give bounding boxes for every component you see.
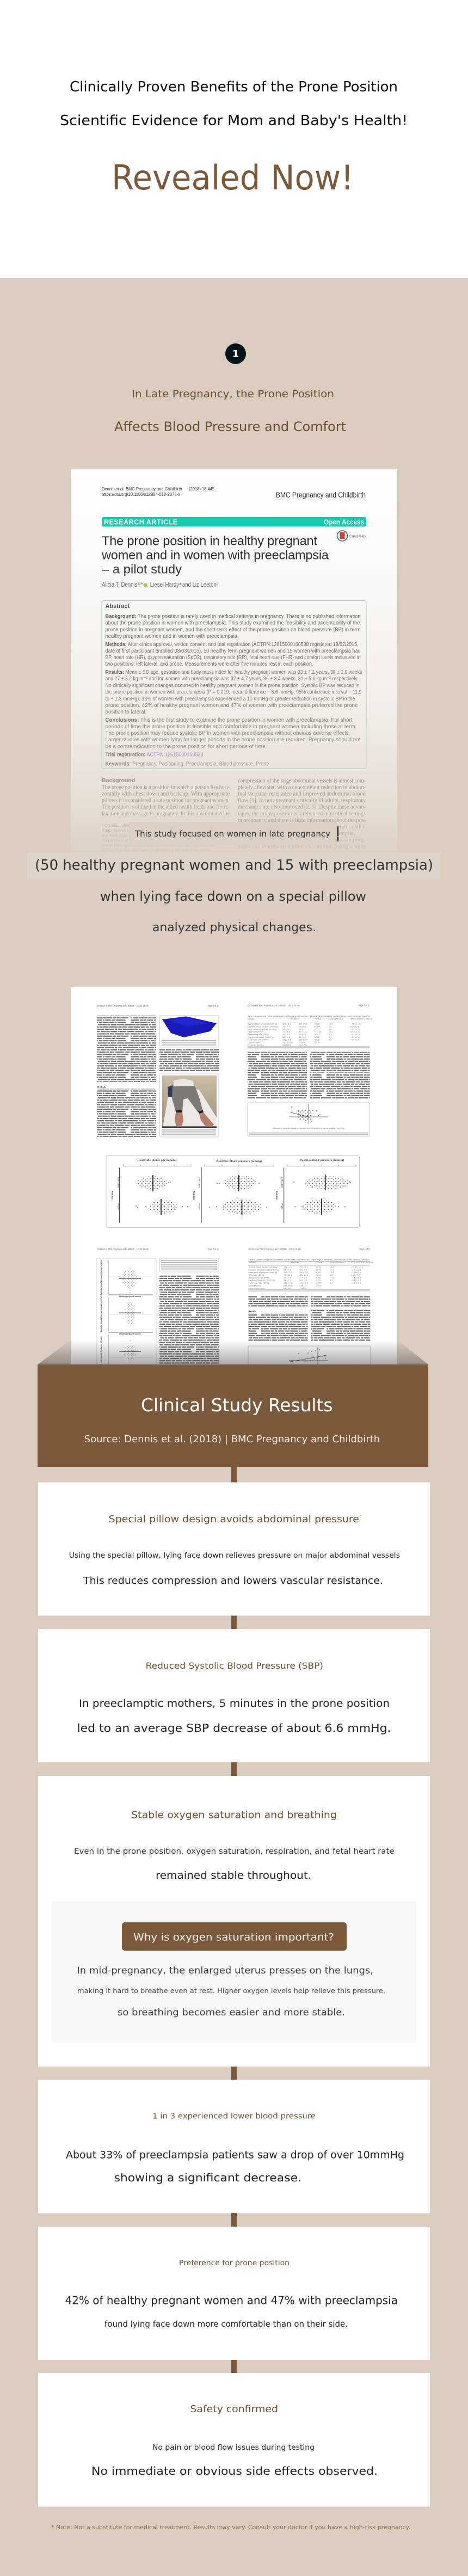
table 1: 98 ± 0.7 — [299, 1036, 306, 1038]
table 2: 0.008 — [316, 1274, 321, 1276]
banner source: Source: Dennis et al. (2018) | BMC Pregnancy and Childbirth — [84, 1434, 380, 1445]
table 1: 95% confidence interval — [350, 1018, 372, 1020]
table 2: 0.339 — [316, 1277, 321, 1279]
table 1: 85 ± 5.6 — [282, 1029, 290, 1031]
table 2: −1.4 to 8.8 — [351, 1282, 361, 1284]
table 1: Mean arterial pressure (mmHg) — [248, 1029, 276, 1031]
card body line 1: About 33% of preeclampsia patients saw a drop of over 10mmHg — [66, 2150, 404, 2161]
figure: beeswarm plots: Position — [193, 1191, 195, 1200]
table 2: Mean difference — [330, 1262, 344, 1264]
table 1: 0.6 — [329, 1038, 331, 1041]
table 2: Mean arterial pressure (mmHg) — [248, 1271, 278, 1274]
abstract box: Trial registration: ACTRN:12615000160538 — [106, 752, 204, 758]
study line 2: when lying face down on a special pillow — [100, 889, 366, 904]
card body line 2: led to an average SBP decrease of about 6.6 mmHg. — [77, 1722, 391, 1735]
table 1: 21 (42%) — [299, 1044, 307, 1046]
card: preference — [38, 2227, 430, 2360]
table 1: 75 ± 8.8 — [282, 1031, 290, 1033]
card: lower blood pressure — [38, 2080, 430, 2213]
table 2: −0.4 to 0.6 — [351, 1279, 361, 1281]
table 1: Table 1 Lateral and prone position in healthy pregnant women – physiological variables, comfort scores and preferred position — [248, 1015, 370, 1018]
table 2: 0.257 — [316, 1282, 321, 1284]
paper title: The prone position in healthy pregnant — [102, 533, 317, 548]
connector — [231, 1467, 237, 1483]
table 2: 158 ± 10 — [284, 1266, 292, 1268]
figure: beeswarm plots: Diastolic blood pressure (mmHg) — [217, 1160, 262, 1163]
table 1: −2.6 — [329, 1023, 333, 1025]
figure: change plots: Diastolic blood pressure change (mmHg) — [100, 1296, 102, 1332]
crossmark icon — [337, 531, 366, 541]
table 1: 0.004 — [315, 1025, 320, 1028]
table 2: 0.1 — [330, 1279, 332, 1281]
figure: change plots: Systolic blood pressure change (mmHg) — [100, 1259, 102, 1295]
card body line 1: Using the special pillow, lying face down relieves pressure on major abdominal vessels — [69, 1552, 400, 1560]
paper background column: Corner Flemington Rd & Grattan St, Parkville, Victoria 3052, Australia — [102, 843, 214, 848]
card body line 1: No pain or blood flow issues during testing — [152, 2444, 315, 2452]
abstract box: the prone position in women with preeclampsia (P = 0.019, mean difference − 6.6 mmHg, 95% confidence interval − 11.9 — [106, 689, 362, 696]
paper title: – a pilot study — [102, 562, 182, 576]
table 2: 0.382 — [316, 1279, 321, 1281]
figure: change plots: Heart rate change (beats per minute) — [100, 1337, 102, 1368]
table 1: 17 ± 3.3 — [299, 1034, 306, 1036]
card heading: Stable oxygen saturation and breathing — [131, 1809, 337, 1821]
page 4 header — [97, 1247, 371, 1251]
explainer button — [122, 1922, 347, 1951]
table 2: Respiratory rate (BPM) — [248, 1277, 270, 1279]
card heading: Special pillow design avoids abdominal pressure — [109, 1514, 359, 1525]
paper background column: flow [1]. In non-pregnant critically ill adults, respiratory — [238, 798, 366, 803]
table 1 — [248, 1015, 372, 1049]
table 1: 0.367 — [315, 1034, 320, 1036]
table 1: −0.4 to 1.2 — [350, 1034, 360, 1036]
card body line 2: showing a significant decrease. — [114, 2171, 301, 2184]
table 2: 98 ± 0.6 — [299, 1279, 307, 1281]
table 2: 17 ± 2.3 — [299, 1277, 307, 1279]
table 2: −3.7 to 3.5 — [351, 1269, 361, 1271]
abstract box: healthy pregnant women and in women with preeclampsia. — [106, 634, 238, 640]
paper title: women and in women with preeclampsia — [101, 548, 329, 562]
table 2: 141 ± 9.6 — [299, 1282, 308, 1284]
figure: beeswarm plots: Left lateral — [117, 1177, 120, 1188]
explainer line 2: making it hard to breathe even at rest. Higher oxygen levels help relieve this pressure, — [77, 1987, 385, 1995]
table 1: 0.519 — [315, 1038, 320, 1041]
table 1: 131 ± 8.6 — [282, 1038, 291, 1041]
connector — [231, 1762, 237, 1776]
abstract box: about the prone position in women with preeclampsia. This study examined the feasibility and acceptability of the — [106, 620, 360, 626]
abstract box: Results: Mean ± SD age, gestation and body mass index for healthy pregnant women was 33 ± 4.1 years, 38 ± 1.0 weeks — [106, 669, 362, 675]
explainer line 3: so breathing becomes easier and more stable. — [118, 2007, 345, 2018]
journal citation: https://doi.org/10.1186/s12884-018-2073-x — [102, 492, 180, 497]
abstract box: Conclusions: This is the first study to examine the prone position in women with preeclampsia. For short — [106, 717, 353, 723]
table 2: 85 ± 7.8 — [284, 1269, 291, 1271]
explainer button: Why is oxygen saturation important? — [133, 1932, 334, 1943]
table 2: P value — [316, 1262, 323, 1264]
table 1: 0.076 — [315, 1042, 320, 1044]
figure: change plots — [97, 1258, 156, 1368]
study line 1: (50 healthy pregnant women and 15 with preeclampsia) — [35, 857, 433, 874]
card: systolic blood pressure — [38, 1629, 430, 1762]
title line 1: Clinically Proven Benefits of the Prone Position — [70, 79, 398, 95]
table 1: −2.4 to 3.7 — [350, 1038, 360, 1041]
figure: beeswarm plots: Prone — [117, 1203, 120, 1210]
paper background column: tages, the prone position is rarely used in medical settings — [238, 811, 366, 817]
table 2: 7 (47%) — [299, 1288, 307, 1290]
card body line 2: No immediate or obvious side effects observed. — [91, 2464, 378, 2477]
connector — [231, 2213, 237, 2227]
table 2: 7 (5-25.8) — [284, 1284, 293, 1287]
figure: beeswarm plots: Position — [111, 1191, 114, 1200]
table 2: 4.2 — [330, 1274, 332, 1276]
footnote: * Note: Not a substitute for medical treatment. Results may vary. Consult your doctor if you have a high-risk pregnancy. — [51, 2524, 410, 2531]
table 2: Comfort score — [248, 1284, 261, 1287]
paper background column: laxation and massage in pregnancy. In this position uterine — [102, 811, 230, 817]
abstract box: Larger studies with women lying for longer periods in the prone position are required. Pregnancy should not — [106, 737, 361, 743]
paper background column: mechanics are also improved [2, 3]. Despite these advan- — [238, 804, 366, 810]
page 4 header: Dennis et al. BMC Pregnancy and Childbirth (2018) 18:445 — [97, 1247, 149, 1251]
header background — [0, 0, 468, 278]
paper background column: ¹Departments of Pharmacology and Therapeutics, — [102, 828, 188, 833]
table 2: Table 2 Lateral and prone position in women with preeclampsia – physiological variables, comfort scores and preferred position — [248, 1258, 369, 1261]
table 2: 84 ± 7.5 — [299, 1269, 307, 1271]
journal citation: Dennis et al. BMC Pregnancy and Childbirth (2018) 18:445 — [102, 487, 214, 491]
table 1: 73 ± 6.5 — [299, 1025, 306, 1028]
callout: study focus — [129, 822, 338, 845]
table 2: Heart rate (BPM) — [248, 1274, 264, 1276]
table 1: Mean difference — [329, 1018, 343, 1020]
paper background column: pillows it is considered a safe position for pregnant women. — [102, 798, 230, 803]
figure: beeswarm plots: Heart rate (beats per minute) — [137, 1159, 177, 1161]
table 1: 6.8 to 13.3 — [350, 1031, 360, 1033]
abstract box: Keywords: Pregnancy, Positioning, Preeclampsia, Blood pressure, Prone — [106, 761, 269, 767]
table 2: 110 ± 7.6 — [299, 1271, 308, 1274]
title headline: Revealed Now! — [112, 158, 354, 198]
explainer line 1: In mid-pregnancy, the enlarged uterus presses on the lungs, — [77, 1965, 373, 1976]
section kicker: In Late Pregnancy, the Prone Position — [132, 388, 334, 400]
figure: beeswarm plots — [106, 1155, 359, 1228]
card: safety — [38, 2373, 430, 2507]
page 2: Methods — [97, 1085, 106, 1089]
table 1: Position — [291, 1018, 299, 1020]
paper background column: The position is utilised in the allied health fields and for re- — [102, 804, 230, 810]
table 1: 7 (6-8) — [299, 1042, 305, 1044]
table 1: Comfort score — [248, 1042, 261, 1044]
table 1: 29 (58%) — [282, 1044, 291, 1046]
callout: study focus: This study focused on women in late pregnancy — [134, 829, 330, 839]
connector — [231, 1615, 237, 1630]
table 1: 0.5 to 3.8 — [350, 1025, 359, 1028]
table 2: 0.192 — [316, 1271, 321, 1274]
table 1: Oxygen saturation (SpO2,%) — [248, 1036, 274, 1038]
table 1: 1.6 — [329, 1025, 331, 1028]
page 4 header: Page 5 of 10 — [208, 1247, 219, 1251]
abstract box: position to lateral. — [106, 709, 147, 715]
study participants text — [27, 852, 441, 935]
card: oxygen saturation — [38, 1776, 430, 2067]
table 1: −0.2 to 0.4 — [350, 1036, 360, 1038]
table 2: 8 (53%) — [284, 1288, 291, 1290]
table 2: 18 ± 3.4 — [284, 1277, 291, 1279]
table 2 — [248, 1258, 373, 1292]
card body line 2: remained stable throughout. — [156, 1870, 311, 1882]
step number badge — [225, 343, 246, 364]
table 1: Preferred position — [248, 1044, 264, 1046]
table 1: Fetal heart rate (BPM) — [248, 1038, 268, 1041]
table 2: −1.4 to 0.1 — [351, 1277, 361, 1279]
abstract box: date of first participant enrolled 03/03/2015), 50 healthy term pregnant women and 15 women with preeclampsia had — [106, 648, 361, 654]
table 2: Diastolic blood pressure (mmHg) — [248, 1269, 279, 1271]
paper background column: ²Department of Anaesthesia, The Royal Women's — [102, 838, 188, 843]
explainer panel — [52, 1901, 416, 2043]
paper background column: inal vascular resistance and improved abdominal blood — [238, 791, 366, 797]
table 1: 0.1 — [329, 1036, 331, 1038]
abstract box: Methods: After ethics approval, written consent and trial registration (ACTRN:12615000160538 registered 18/02/2015, — [106, 642, 358, 648]
table 2: 0.674 — [316, 1269, 321, 1271]
table 2: 83 ± 13.4 — [299, 1274, 308, 1276]
card body line 2: found lying face down more comfortable than on their side. — [104, 2320, 348, 2329]
table 1: Diastolic blood pressure (mmHg) — [248, 1025, 278, 1028]
paper inner pages image — [71, 987, 397, 1368]
table 2: 7 (5-10) — [299, 1284, 307, 1287]
table 1: P value — [315, 1018, 322, 1020]
section title: Affects Blood Pressure and Comfort — [114, 419, 346, 434]
table 2: Oxygen saturation (SpO2,%) — [248, 1279, 275, 1281]
abstract box: to − 1.3 mmHg). 33% of women with preeclampsia experienced a 10 mmHg or greater reduction in systolic BP in the — [106, 696, 355, 702]
banner title: Clinical Study Results — [141, 1395, 333, 1416]
card heading: Preference for prone position — [179, 2259, 290, 2267]
table 1: 10.1 — [329, 1031, 332, 1033]
figure: beeswarm plots: Left lateral — [198, 1177, 201, 1188]
connector — [231, 2067, 237, 2080]
table 1: 85 ± 7.2 — [299, 1029, 306, 1031]
paper background column: Preeclampsia is a common condition in human preg- — [238, 837, 366, 843]
table 2: 95% confidence interval — [351, 1262, 373, 1264]
table 1: 110 ± 9.3 — [299, 1023, 307, 1025]
abstract box: be a contraindication to the prone position for short periods of time. — [106, 743, 267, 750]
table 2: 98 ± 0.9 — [284, 1279, 291, 1281]
paper background column: sible effects of the prone position. There is no information — [238, 824, 366, 830]
results banner — [38, 1364, 428, 1467]
table 1: 0.521 — [315, 1029, 320, 1031]
table 1: Systolic blood pressure (mmHg) — [248, 1023, 278, 1025]
paper background column: in pregnancy and there is little information about the pos- — [238, 817, 366, 823]
journal citation — [102, 487, 366, 499]
figure: beeswarm plots: Left lateral — [281, 1177, 284, 1188]
abstract box: prone position. 42% of healthy pregnant women and 47% of women with preeclampsia preferred the prone — [106, 703, 358, 709]
figure: beeswarm plots: Prone — [198, 1203, 201, 1210]
figure: scatter plot: Change in systolic blood pressure from left lateral to prone position (mmHg) — [273, 1127, 345, 1129]
abstract box: BP, heart rate (HR), oxygen saturation (SpO2), respiratory rate (RR), fetal heart rate (FHR) and comfort levels measured in — [106, 655, 361, 661]
table 2: Position — [291, 1262, 299, 1264]
card body line 1: Even in the prone position, oxygen saturation, respiration, and fetal heart rate — [74, 1847, 395, 1856]
table 2: −2.8 — [330, 1271, 334, 1274]
page 4 header: Page 6 of 10 — [359, 1247, 371, 1251]
figure: correlation plot — [248, 1346, 371, 1368]
paper background column: pletely alleviated with a concomitant reduction in abdom- — [238, 785, 366, 790]
paper background column: and Radiology, The University of Melbourne, — [102, 833, 178, 838]
abstract box: prone position in pregnant women, and the short-term effect of the prone position on blood pressure (BP) in term — [106, 627, 360, 633]
table 2: 0.019 — [316, 1266, 321, 1268]
paper background column: zontally with chest down and back up. With appropriate — [102, 791, 230, 797]
figure: change plots: Healthy pregnant women — [119, 1295, 141, 1298]
paper background column: compression of the large abdominal vessels is almost com- — [238, 778, 366, 784]
step number badge: 1 — [232, 348, 239, 360]
paper background column: Full list of author information is available at the end of the article — [102, 848, 210, 852]
table 1: 85 ± 12.2 — [299, 1031, 307, 1033]
table 2: −11.9 to −1.3 — [351, 1266, 363, 1268]
page 3 — [248, 1004, 372, 1136]
table 1: 0.6 — [329, 1029, 331, 1031]
table 2: 1.4 to 7.0 — [351, 1274, 360, 1276]
card body line 2: This reduces compression and lowers vascular resistance. — [83, 1575, 383, 1587]
table 2: 138 ± 7.9 — [284, 1282, 292, 1284]
table 2: 157 ± 9.1 — [299, 1266, 308, 1268]
card heading: Reduced Systolic Blood Pressure (SBP) — [146, 1661, 323, 1671]
figure: change plots: Healthy pregnant women — [119, 1333, 141, 1335]
page 2: Page 2 of 10 — [208, 1005, 219, 1007]
table 1: 0.009 — [315, 1023, 320, 1025]
card heading: 1 in 3 experienced lower blood pressure — [152, 2112, 316, 2120]
figure: prone photo — [159, 1074, 219, 1137]
title block — [60, 79, 408, 198]
paper first page image — [71, 469, 397, 852]
abstract box: The prone position may reduce systolic BP in women with preeclampsia without obvious adverse effects. — [106, 730, 350, 736]
table 1: −1.2 to 2.3 — [350, 1029, 360, 1031]
abstract box: No clinically significant changes occurred in healthy pregnant women in the prone position. Systolic BP was reduced in — [106, 683, 360, 689]
page 3: Page 3 of 10 — [359, 1004, 370, 1007]
card heading: Safety confirmed — [190, 2403, 278, 2415]
table 1: 130 ± 8.4 — [299, 1038, 307, 1041]
title line 2: Scientific Evidence for Mom and Baby's Health! — [60, 113, 408, 129]
table 2: Fetal heart rate (BPM) — [248, 1282, 269, 1284]
page 3: Dennis et al. BMC Pregnancy and Childbirth (2018) 18:445 — [248, 1004, 300, 1007]
figure: beeswarm plots: Prone — [281, 1203, 284, 1210]
table 1: Heart rate (BPM) — [248, 1031, 263, 1033]
paper background column: * Correspondence: alicia.dennis@unimelb.edu.au — [102, 823, 188, 828]
page 2: Dennis et al. BMC Pregnancy and Childbirth (2018) 18:445 — [97, 1005, 149, 1007]
table 2: −0.9 — [330, 1269, 334, 1271]
table 1: −4.5 to −0.7 — [350, 1023, 361, 1025]
paper inner pages image: Results — [248, 1309, 256, 1313]
table 1: 0.4 — [329, 1034, 331, 1036]
table 2: 79 ± 11.1 — [284, 1274, 292, 1276]
crossmark icon: CrossMark — [349, 533, 366, 539]
paper background column: The prone position is a position in which a person lies hori- — [102, 785, 230, 790]
table 2: −6.6 — [330, 1266, 334, 1268]
figure: beeswarm plots: Systolic blood pressure (mmHg) — [300, 1159, 344, 1161]
abstract box — [102, 601, 366, 769]
table 1: 17 ± 2.9 — [282, 1034, 290, 1036]
journal citation: BMC Pregnancy and Childbirth — [276, 490, 366, 499]
card: pillow design — [38, 1483, 430, 1615]
figure: scatter plot — [248, 1103, 370, 1136]
abstract box: and 27 ± 3.2 kg.m⁻² and for women with preeclampsia was 32 ± 4.7 years, 36 ± 3.4 weeks, 31 ± 5.6 kg.m⁻² respectively. — [106, 676, 358, 682]
paper background column: Background — [102, 777, 135, 784]
table 1: Variable — [248, 1018, 255, 1020]
table 2: −7.1 to 1.6 — [351, 1271, 361, 1274]
research article bar: RESEARCH ARTICLE — [104, 518, 177, 526]
paper title — [101, 533, 329, 576]
section heading — [114, 388, 346, 434]
table 1: 112 ± 8.8 — [282, 1023, 291, 1025]
abstract box: Abstract — [106, 603, 130, 610]
paper background column — [102, 777, 366, 852]
paper authors: Alicia T. Dennis¹²* , Liesel Hardy³ and Liz Leeton² — [102, 582, 218, 588]
table 2: Systolic blood pressure (mmHg) — [248, 1266, 278, 1268]
table 1: 0.382 — [315, 1036, 320, 1038]
table 2: 0.524 — [316, 1284, 321, 1287]
figure caption box — [159, 1258, 219, 1272]
page 4 header: Dennis et al. BMC Pregnancy and Childbirth (2018) 18:445 — [248, 1247, 301, 1251]
paper background column: about the prone position in women with preeclampsia. — [238, 831, 355, 837]
table 2: −0.7 — [330, 1277, 334, 1279]
abstract box: Background: The prone position is rarely used in medical settings in pregnancy. There is no published information — [106, 614, 361, 619]
research article bar: Open Access — [324, 518, 364, 526]
fold shadow — [38, 1340, 428, 1364]
table 1: < 0.001 — [315, 1031, 322, 1033]
paper background column: nancy [5]. Worldwide it affects 6.5 million young women — [238, 844, 366, 850]
figure: beeswarm plots: Position — [275, 1191, 278, 1200]
study line 3: analyzed physical changes. — [152, 921, 316, 935]
table 2: Preferred position — [248, 1288, 264, 1290]
table 1: 7 (6.8-10.0) — [282, 1042, 293, 1044]
table 1: Respiratory rate (BPM) — [248, 1034, 269, 1036]
table 2: 110 ± 7.8 — [284, 1271, 292, 1274]
table 2: Variable — [248, 1262, 256, 1264]
abstract box: two positions: left lateral, and prone. Measurements were after five minutes rest in each position. — [106, 661, 313, 667]
connector — [231, 2360, 237, 2373]
page 2 — [97, 1005, 219, 1137]
card body line 1: In preeclamptic mothers, 5 minutes in the prone position — [79, 1698, 390, 1710]
table 1: 98 ± 0.8 — [282, 1036, 290, 1038]
table 1: 70 ± 5.7 — [282, 1025, 290, 1028]
table 2: 3.2 — [330, 1282, 332, 1284]
card body line 1: 42% of healthy pregnant women and 47% with preeclampsia — [65, 2294, 398, 2307]
abstract box: periods of time the prone position is feasible and comfortable in pregnant women including those at term. — [106, 724, 357, 730]
research article bar — [102, 517, 366, 527]
figure: pillow — [159, 1016, 219, 1047]
